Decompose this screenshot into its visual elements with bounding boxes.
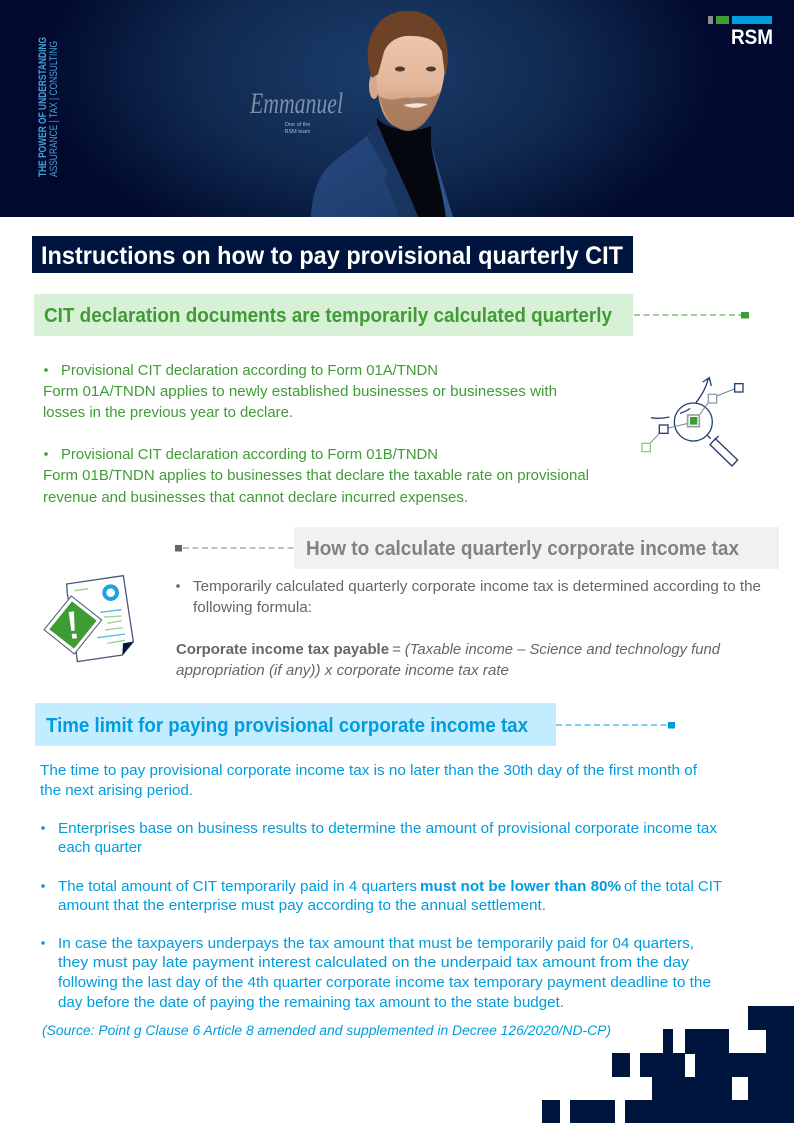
text block: formula: Corporate income tax payable [176, 642, 389, 658]
text block: form descriptions [43, 363, 589, 506]
text block: form descriptions: Form 01A/TNDN applies to newly established businesses or businesses with [43, 384, 557, 400]
decorative pixel block [542, 1006, 794, 1123]
text block: form descriptions: Provisional CIT declaration according to Form 01A/TNDN [61, 363, 438, 379]
panel: CIT declaration documents [34, 294, 749, 506]
heading: CIT declaration: CIT declaration documents are temporarily calculated quarterly [44, 305, 613, 327]
RSM logo: RSM [731, 26, 773, 49]
heading: time limit [35, 703, 556, 746]
text block: formula: = (Taxable income – Science and technology fund [392, 642, 721, 658]
source note: (Source: Point g Clause 6 Article 8 amended and supplemented in Decree 126/2020/ND-CP) [42, 1023, 611, 1038]
text block: time limit details: Enterprises base on business results to determine the amount of provisional corporate income tax [58, 821, 718, 837]
panel: time limit [35, 703, 722, 1038]
text block: time limit details: the next arising period. [40, 783, 193, 799]
signature: RSM team [285, 129, 311, 135]
heading: how to calculate: How to calculate quarterly corporate income tax [306, 538, 739, 560]
heading: CIT declaration [34, 294, 633, 336]
icon: magnifier network [642, 378, 743, 466]
text block: form descriptions: losses in the previous year to declare. [43, 405, 293, 421]
signature: One of the [285, 122, 310, 128]
text block: form descriptions: Form 01B/TNDN applies to businesses that declare the taxable rate on provisional [43, 468, 589, 484]
signature: Emmanuel [249, 87, 343, 120]
heading: time limit: Time limit for paying provisional corporate income tax [46, 715, 528, 737]
text block: time limit details: of the total CIT [624, 879, 722, 895]
connector: blue dashed [556, 722, 675, 728]
RSM logo [708, 16, 773, 49]
connector: grey dashed [175, 545, 294, 552]
heading: how to calculate [294, 527, 779, 569]
text block: time limit details: must not be lower than 80% [420, 879, 621, 895]
text block: formula [176, 579, 761, 679]
text block: formula: Temporarily calculated quarterly corporate income tax is determined according to the [193, 579, 761, 595]
text block: time limit details: following the last day of the 4th quarter corporate income tax temporary payment deadline to the [58, 975, 711, 991]
text block: form descriptions: Provisional CIT declaration according to Form 01B/TNDN [61, 447, 438, 463]
text block: time limit details: In case the taxpayers underpays the tax amount that must be temporarily paid for 04 quarters, [58, 936, 694, 952]
text block: time limit details: day before the date of paying the remaining tax amount to the state budget. [58, 995, 564, 1011]
text block: formula: appropriation (if any)) x corporate income tax rate [176, 663, 509, 679]
icon: document alert [44, 576, 133, 662]
text block: time limit details: The total amount of CIT temporarily paid in 4 quarters [58, 879, 417, 895]
vertical tagline: ASSURANCE | TAX | CONSULTING [48, 41, 60, 177]
text block: time limit details: they must pay late payment interest calculated on the underpaid tax amount from the day [58, 955, 690, 971]
header banner [0, 0, 794, 217]
vertical tagline [37, 37, 60, 177]
text block: time limit details: The time to pay provisional corporate income tax is no later than the 30th day of the first month of [40, 763, 698, 779]
text block: formula: following formula: [193, 600, 312, 616]
connector: green dashed [634, 312, 749, 318]
portrait photo illustration [311, 11, 453, 217]
text block: form descriptions: revenue and businesses that cannot declare incurred expenses. [43, 490, 468, 506]
signature [249, 87, 343, 135]
panel: how to calculate [44, 527, 779, 679]
text block: time limit details: each quarter [58, 840, 142, 856]
title bar: Instructions on how to pay provisional quarterly CIT [41, 242, 623, 270]
text block: time limit details: amount that the enterprise must pay according to the annual settlement. [58, 898, 546, 914]
text block: time limit details [40, 763, 722, 1011]
